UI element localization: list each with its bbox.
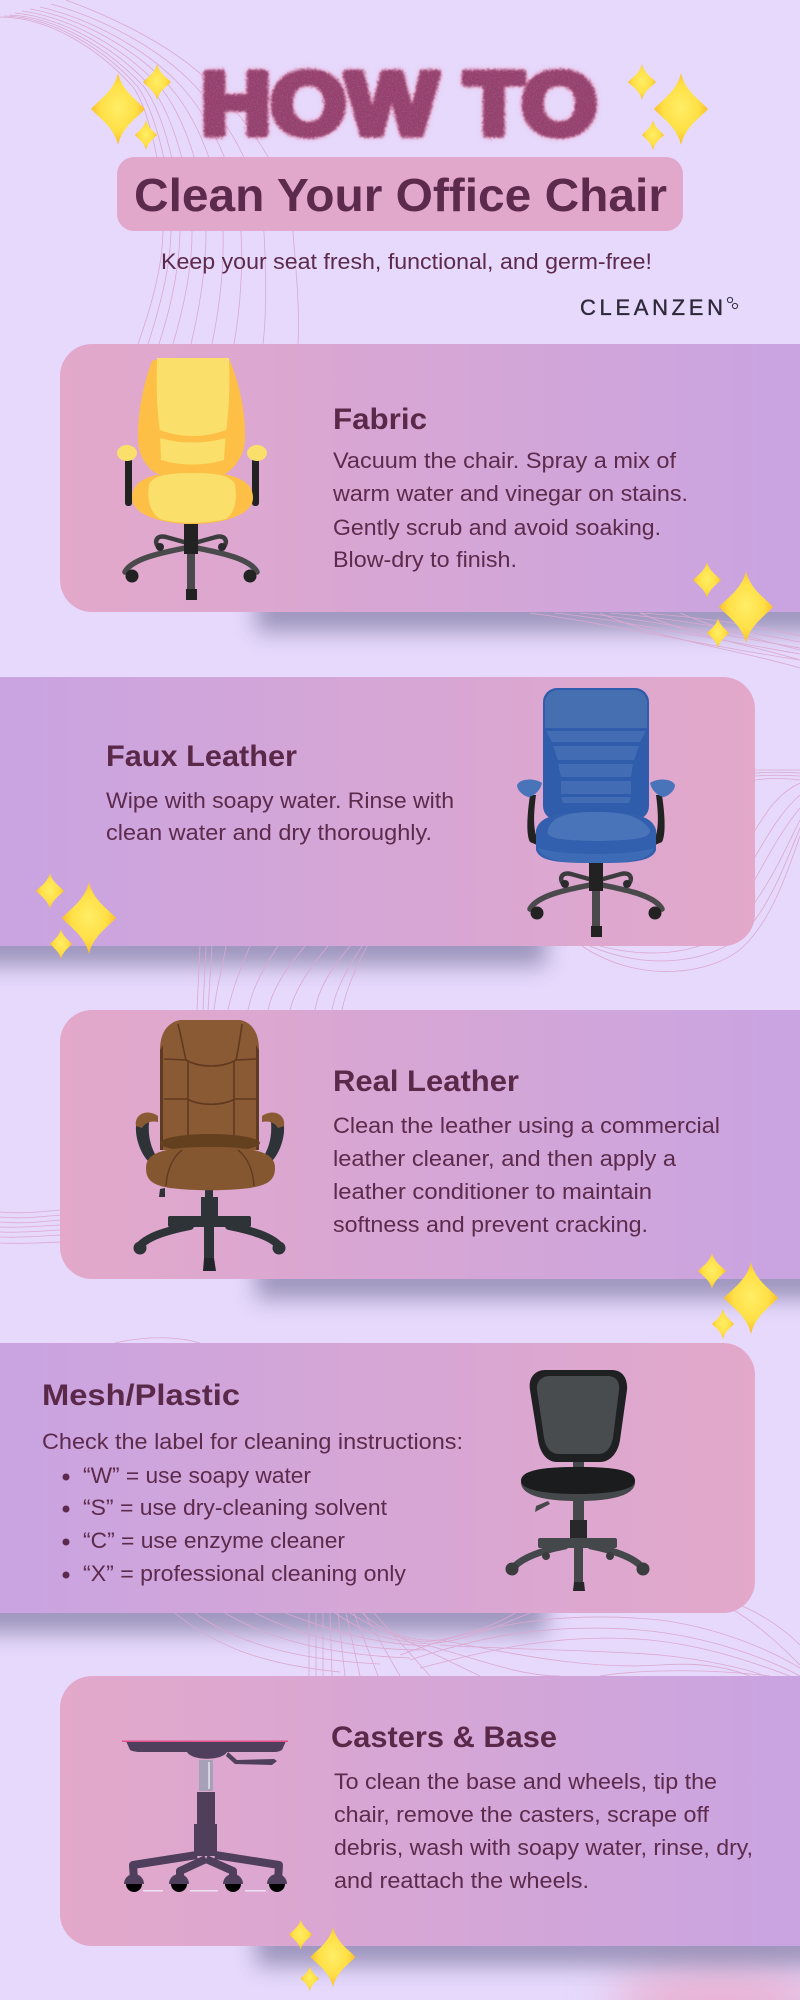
header title: how to: HOW TO	[201, 54, 597, 153]
card: faux leather	[0, 677, 755, 946]
list: cleaning codes: “W” = use soapy water	[83, 1463, 312, 1488]
banner text: Clean Your Office Chair	[134, 169, 667, 221]
icon: yellow fabric chair	[117, 358, 267, 600]
heading: casters and base: Casters & Base	[331, 1721, 557, 1754]
list: cleaning codes: “X” = professional cleaning only	[83, 1561, 407, 1586]
text: faux leather instructions: Wipe with soapy water. Rinse with	[106, 788, 454, 813]
text: fabric instructions: Gently scrub and avoid soaking.	[333, 515, 661, 540]
card: casters and base	[60, 1676, 800, 1946]
text: casters instructions: chair, remove the casters, scrape off	[334, 1802, 710, 1827]
decorative glow bottom right	[610, 1970, 800, 2000]
text: real leather instructions: leather cleaner, and then apply a	[333, 1146, 677, 1171]
heading: mesh plastic: Mesh/Plastic	[42, 1379, 240, 1412]
card: real leather	[60, 1010, 800, 1279]
card background	[60, 344, 800, 612]
icon: blue faux leather chair	[517, 688, 675, 937]
heading: faux leather: Faux Leather	[106, 740, 297, 773]
text: real leather instructions: Clean the leather using a commercial	[333, 1113, 720, 1138]
sparkles: faux leather card	[36, 873, 116, 959]
heading: fabric: Fabric	[333, 403, 427, 436]
sparkles: header right	[628, 64, 708, 150]
icon: black mesh chair	[506, 1370, 650, 1591]
text: real leather instructions: leather conditioner to maintain	[333, 1179, 652, 1204]
text: real leather instructions: softness and prevent cracking.	[333, 1212, 648, 1237]
list: cleaning codes	[62, 1463, 407, 1586]
text: fabric instructions: warm water and vinegar on stains.	[332, 481, 688, 506]
text: fabric instructions: Vacuum the chair. Spray a mix of	[333, 448, 677, 473]
sparkles: fabric card	[693, 562, 773, 648]
list: cleaning codes: “C” = use enzyme cleaner	[83, 1528, 346, 1553]
card shadows	[0, 590, 800, 1966]
text: casters instructions: To clean the base and wheels, tip the	[334, 1769, 717, 1794]
logo: cleanzen: CLEANZEN	[580, 295, 723, 320]
list: cleaning codes: “S” = use dry-cleaning solvent	[83, 1495, 388, 1520]
sparkles: header left	[91, 64, 171, 150]
text: real leather instructions	[333, 1113, 720, 1237]
tagline: Keep your seat fresh, functional, and germ-free!	[161, 249, 652, 274]
text: fabric instructions: Blow-dry to finish.	[333, 547, 517, 572]
text: faux leather instructions	[106, 788, 454, 845]
card: fabric	[60, 344, 800, 612]
heading: real leather: Real Leather	[333, 1065, 519, 1098]
icon: brown leather chair	[134, 1020, 286, 1271]
sparkles: casters card	[289, 1920, 355, 1991]
card: mesh / plastic	[0, 1343, 755, 1613]
text: faux leather instructions: clean water and dry thoroughly.	[106, 820, 432, 845]
text: casters instructions: and reattach the wheels.	[334, 1868, 589, 1893]
sparkles: real leather card	[698, 1253, 778, 1339]
card background	[0, 677, 755, 946]
text: fabric instructions	[332, 448, 688, 572]
card background	[60, 1010, 800, 1279]
text: label instructions: Check the label for cleaning instructions:	[42, 1429, 463, 1454]
subtitle banner	[117, 157, 683, 231]
text: casters instructions: debris, wash with soapy water, rinse, dry,	[334, 1835, 753, 1860]
card background	[0, 1343, 755, 1613]
icon: chair base with casters	[122, 1740, 288, 1892]
text: casters instructions	[334, 1769, 753, 1893]
card background	[60, 1676, 800, 1946]
